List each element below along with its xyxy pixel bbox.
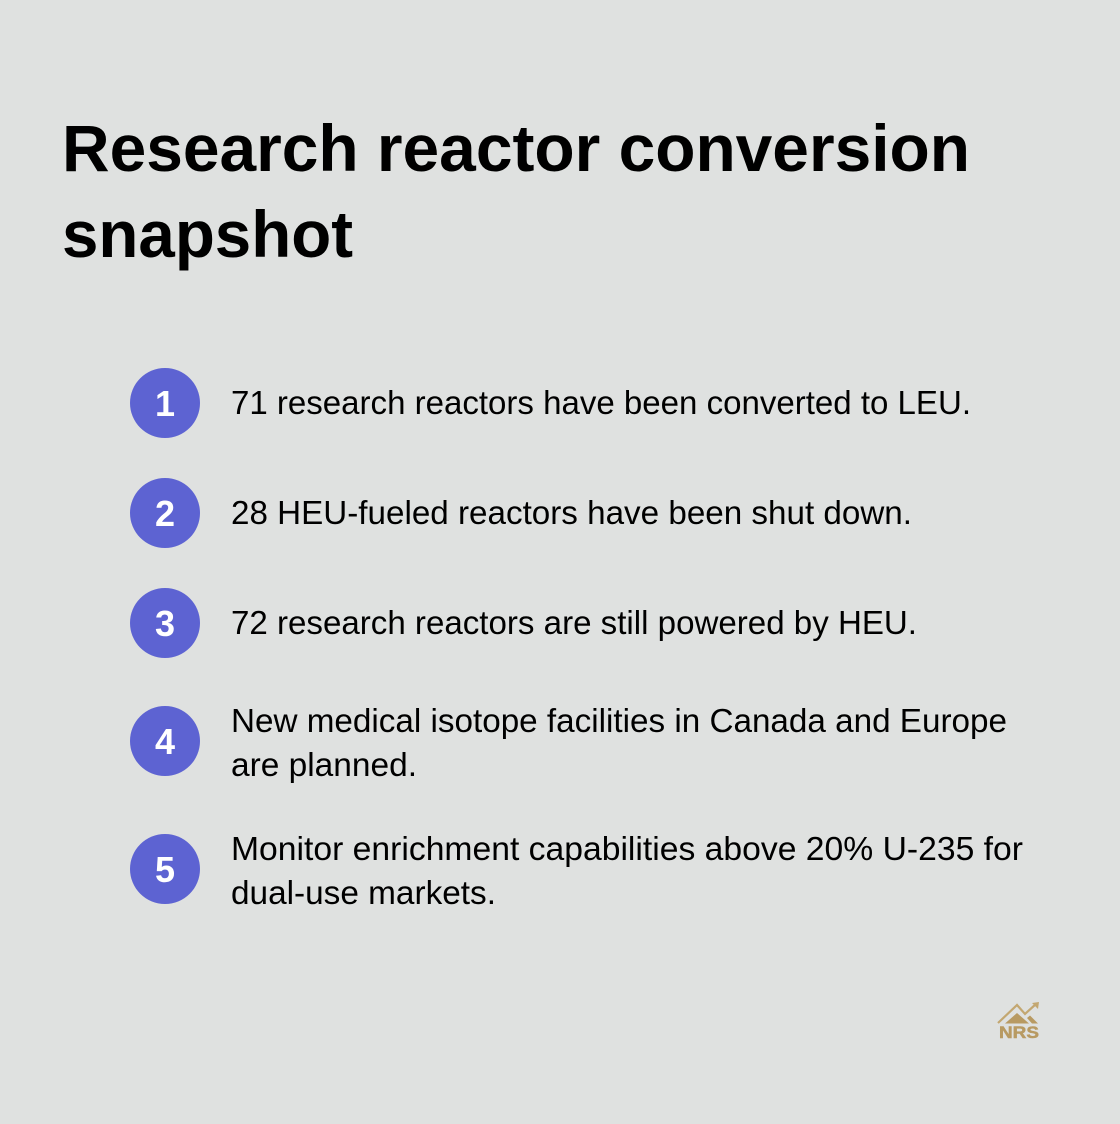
list item 2: 28 HEU-fueled reactors have been shut down. [231, 494, 912, 531]
title: snapshot [62, 197, 353, 271]
list item 5: 5 [155, 849, 175, 890]
logo: NRS: NRS [999, 1023, 1039, 1042]
list item 5: dual-use markets. [231, 874, 496, 911]
list item 4: New medical isotope facilities in Canada and Europe [231, 702, 1007, 739]
list item 3: 3 [155, 603, 175, 644]
list item 5: Monitor enrichment capabilities above 20% U-235 for [231, 830, 1023, 867]
list item 1: 1 [155, 383, 175, 424]
list item 3: 72 research reactors are still powered by HEU. [231, 604, 917, 641]
title [62, 111, 970, 271]
list item 5 [130, 830, 1023, 911]
list item 2 [130, 478, 912, 548]
title: Research reactor conversion [62, 111, 970, 185]
list item 4: are planned. [231, 746, 417, 783]
list item 4 [130, 702, 1007, 783]
list item 2: 2 [155, 493, 175, 534]
list item 1 [130, 368, 971, 438]
logo: NRS [998, 1002, 1039, 1042]
list item 1: 71 research reactors have been converted to LEU. [231, 384, 971, 421]
list item 3 [130, 588, 917, 658]
list item 4: 4 [155, 721, 175, 762]
